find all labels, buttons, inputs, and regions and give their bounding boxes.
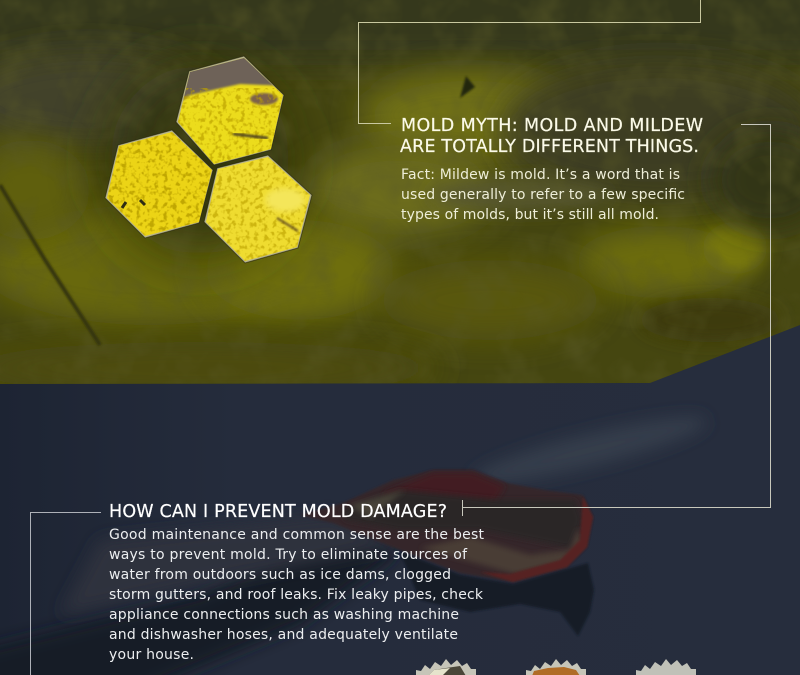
frame lines: prevention left side: [30, 512, 101, 675]
heading: prevent mold damage: HOW CAN I PREVENT MOLD DAMAGE?: [109, 502, 447, 522]
text block: prevention advice: your house.: [109, 647, 194, 663]
text block: prevention advice: appliance connections such as washing machine: [109, 607, 459, 623]
heading: mold myth: ARE TOTALLY DIFFERENT THINGS.: [400, 137, 699, 157]
frame lines: myth section: [358, 0, 700, 124]
text block: prevention advice: Good maintenance and common sense are the best: [109, 527, 484, 543]
icon: three moss hexagons: [104, 56, 312, 264]
text block: prevention advice: and dishwasher hoses, and adequately ventilate: [109, 627, 458, 643]
text block: prevention advice: storm gutters, and roof leaks. Fix leaky pipes, check: [109, 587, 484, 603]
hexagon: left moss photo: [104, 130, 214, 238]
text block: mildew fact: types of molds, but it’s still all mold.: [401, 207, 659, 223]
icon: badge 3: [636, 659, 696, 675]
text block: mildew fact: used generally to refer to a few specific: [401, 187, 685, 203]
heading: mold myth: [400, 116, 703, 157]
text block: mildew fact: Fact: Mildew is mold. It’s a word that is: [401, 167, 680, 183]
hexagon: top moss photo: [176, 56, 284, 166]
heading: mold myth: MOLD MYTH: MOLD AND MILDEW: [401, 116, 703, 136]
text block: prevention advice: ways to prevent mold. Try to eliminate sources of: [109, 547, 468, 563]
text block: prevention advice: water from outdoors such as ice dams, clogged: [109, 567, 451, 583]
text block: prevention advice: [109, 527, 484, 663]
panel: olive moss photo background: [0, 0, 800, 400]
frame lines: connecting myth to prevention: [462, 124, 770, 516]
text block: mildew fact: [401, 167, 685, 223]
icon: badge 2: [526, 659, 586, 675]
hexagon: right moss photo: [204, 154, 312, 264]
leaf reflection: [400, 552, 594, 636]
icon: badge 1: [416, 659, 476, 675]
leaf: [300, 470, 593, 582]
